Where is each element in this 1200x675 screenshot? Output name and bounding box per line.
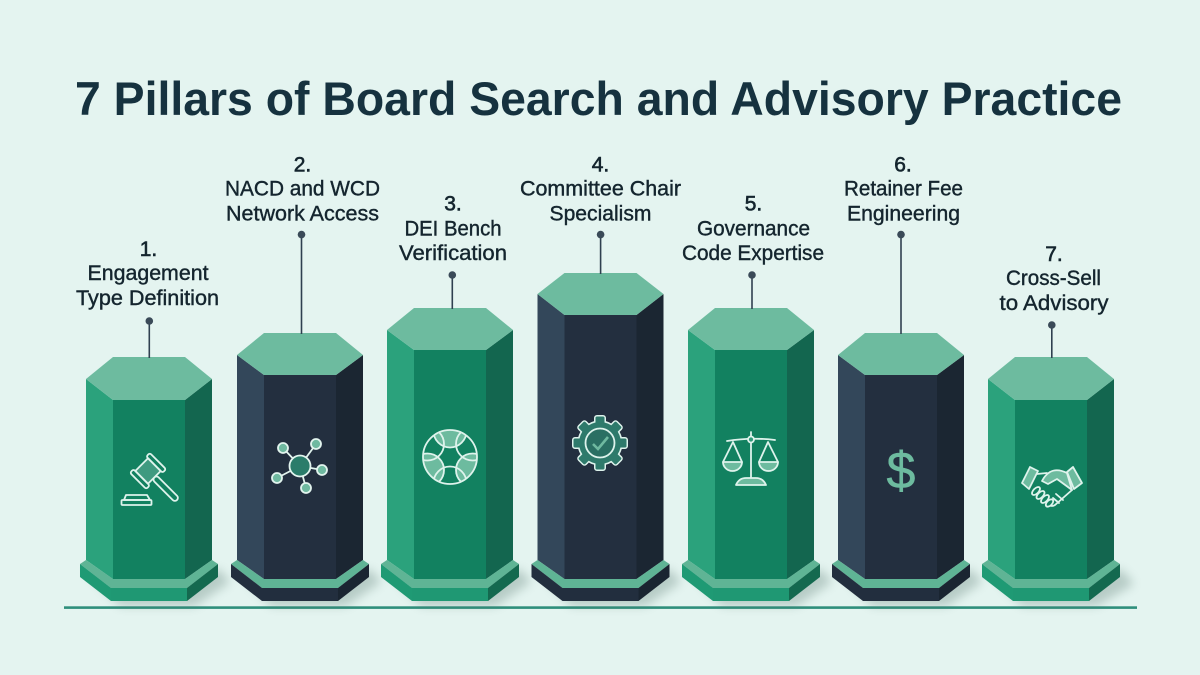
pillar 3: DEI Bench Verification xyxy=(381,193,531,606)
label 4 xyxy=(520,154,681,226)
label 3 xyxy=(399,193,507,265)
pillar 5 body xyxy=(682,308,820,601)
pillar 5: Governance Code Expertise xyxy=(682,193,832,606)
pillar 1: Engagement Type Definition xyxy=(76,238,230,606)
connector 7 xyxy=(1048,321,1056,358)
icon: scales xyxy=(723,432,778,485)
label 3: 3. xyxy=(444,193,462,216)
connector 6 xyxy=(897,231,905,334)
pillar 6 body xyxy=(832,333,970,601)
pillar 1 body xyxy=(80,357,218,601)
label 4: Specialism xyxy=(550,203,652,226)
label 5: 5. xyxy=(745,193,762,216)
pillar 3 body xyxy=(381,308,519,601)
label 7: Cross-Sell xyxy=(1006,267,1101,290)
icon: gear with check xyxy=(574,416,626,470)
label 1: Type Definition xyxy=(76,287,219,310)
label 7 xyxy=(1000,243,1109,315)
connector 2 xyxy=(298,231,305,334)
pillar 7: Cross-Sell to Advisory xyxy=(982,243,1134,606)
label 3: DEI Bench xyxy=(404,218,502,241)
label 5: Code Expertise xyxy=(682,242,824,265)
connector 3 xyxy=(448,271,456,309)
label 2: Network Access xyxy=(226,203,379,226)
pillar 2: NACD and WCD Network Access xyxy=(225,154,381,606)
pillar 2 body xyxy=(231,333,369,601)
icon: gavel xyxy=(122,453,187,510)
label 6: Retainer Fee xyxy=(844,178,963,201)
label 1: 1. xyxy=(140,238,157,261)
label 2: NACD and WCD xyxy=(225,178,380,201)
label 3: Verification xyxy=(399,242,507,265)
pillar 6: Retainer Fee Engineering xyxy=(832,154,982,606)
label 4: 4. xyxy=(592,154,609,176)
icon: network xyxy=(272,439,327,493)
label 2 xyxy=(225,154,380,226)
label 7: to Advisory xyxy=(1000,292,1109,315)
label 1 xyxy=(76,238,219,310)
icon: handshake xyxy=(1022,467,1082,508)
label 5 xyxy=(682,193,824,265)
label 6: Engineering xyxy=(847,203,960,226)
label 6 xyxy=(844,154,963,226)
connector 1 xyxy=(146,317,153,358)
label 5: Governance xyxy=(697,218,810,241)
title: 7 Pillars of Board Search and Advisory Practice xyxy=(75,72,1122,125)
connector 4 xyxy=(597,231,604,274)
pillar 4: Committee Chair Specialism xyxy=(520,154,681,606)
connector 5 xyxy=(748,271,756,309)
pillar 7 body xyxy=(982,357,1120,601)
ground line xyxy=(64,606,1137,609)
label 4: Committee Chair xyxy=(520,178,681,201)
icon: dollar sign: $ xyxy=(887,442,916,500)
label 7: 7. xyxy=(1045,243,1063,266)
label 2: 2. xyxy=(294,154,311,176)
icon: linked circle xyxy=(422,429,478,485)
label 1: Engagement xyxy=(88,262,209,285)
label 6: 6. xyxy=(894,154,912,176)
pillar 4 body xyxy=(532,273,670,601)
